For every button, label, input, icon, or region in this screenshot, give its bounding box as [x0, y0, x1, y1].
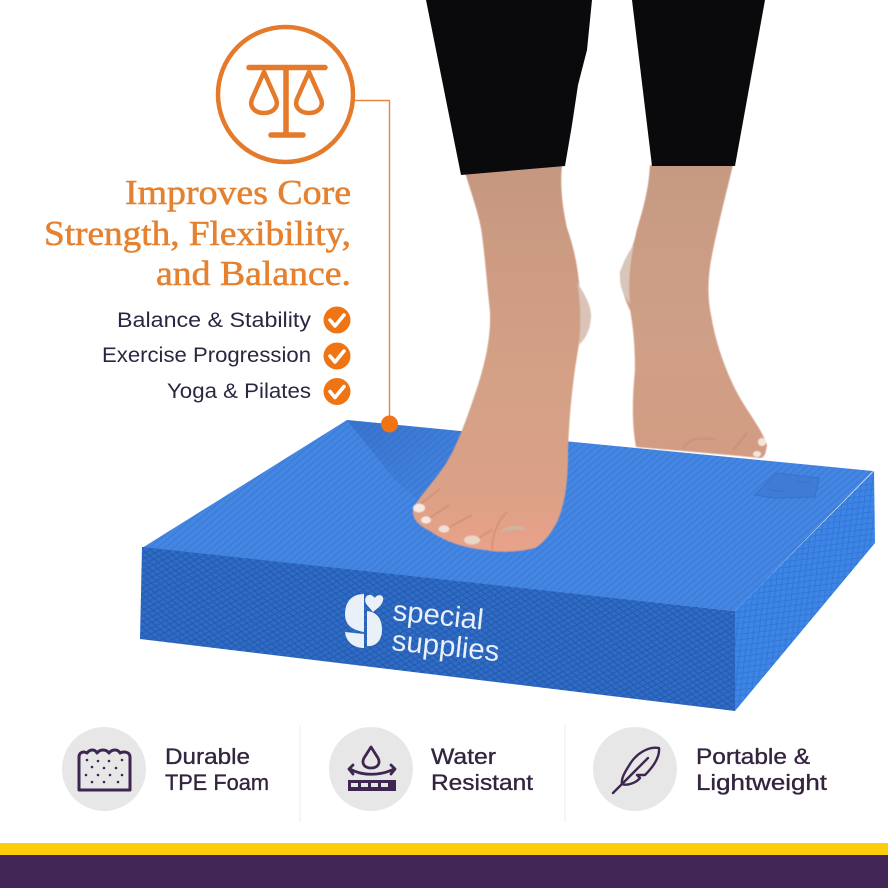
- icon ring: [218, 27, 353, 162]
- pad front face: [140, 547, 735, 711]
- feature: durable TPE foam: [62, 727, 269, 811]
- right leg and foot: [620, 165, 767, 458]
- heading line 2: Strength, Flexibility,: [44, 214, 351, 253]
- label: durable TPE foam: Durable: [165, 744, 250, 769]
- label: water resistant: Water: [431, 744, 496, 769]
- footer yellow stripe: [0, 843, 888, 855]
- callout connector dot: [381, 416, 398, 432]
- icon: water drop over layer: [329, 727, 413, 811]
- heading: [44, 173, 351, 293]
- left pan: [251, 72, 277, 113]
- pad top shaded back area: [347, 420, 470, 510]
- pad top surface: [142, 420, 873, 611]
- heading line 1: Improves Core: [125, 173, 351, 212]
- label: durable TPE foam: TPE Foam: [165, 770, 269, 795]
- heading line 3: and Balance.: [156, 254, 351, 293]
- label: water resistant: [431, 744, 533, 795]
- embossed logo on pad: [755, 473, 819, 498]
- label: water resistant: Resistant: [431, 770, 533, 795]
- divider: [564, 725, 566, 822]
- callout connector line: [355, 100, 390, 424]
- feature: portable and lightweight: [593, 727, 827, 811]
- item: exercise progression: Exercise Progression: [102, 344, 311, 367]
- icon: balance scale in circle: [218, 27, 353, 162]
- item: balance and stability: Balance & Stability: [117, 309, 312, 332]
- brand wordmark line 2: supplies: [390, 625, 501, 668]
- feature: water resistant: [329, 727, 533, 811]
- right pan: [296, 72, 322, 113]
- scale beam post and base: [249, 68, 325, 135]
- benefit checklist: [102, 306, 350, 405]
- icon: feather: [593, 727, 677, 811]
- brand wordmark line 1: special: [391, 595, 485, 636]
- pad right side face: [735, 471, 875, 711]
- label: portable and lightweight: [696, 744, 827, 795]
- icon: foam block: [62, 727, 146, 811]
- right legging: [632, 0, 765, 166]
- label: durable TPE foam: [165, 744, 269, 795]
- label: portable and lightweight: Portable &: [696, 744, 810, 769]
- product photo: balance pad: [140, 420, 875, 711]
- label: portable and lightweight: Lightweight: [696, 770, 827, 795]
- check icon 3: [324, 378, 350, 405]
- item: yoga and pilates: Yoga & Pilates: [167, 380, 311, 403]
- footer purple band: [0, 855, 888, 888]
- photo: legs and feet: [413, 0, 767, 552]
- divider: [300, 725, 301, 822]
- pad brand mark: [345, 594, 383, 648]
- left leg and foot: [413, 165, 591, 552]
- check icon 1: [324, 306, 350, 334]
- left legging: [426, 0, 592, 175]
- check icon 2: [324, 342, 350, 370]
